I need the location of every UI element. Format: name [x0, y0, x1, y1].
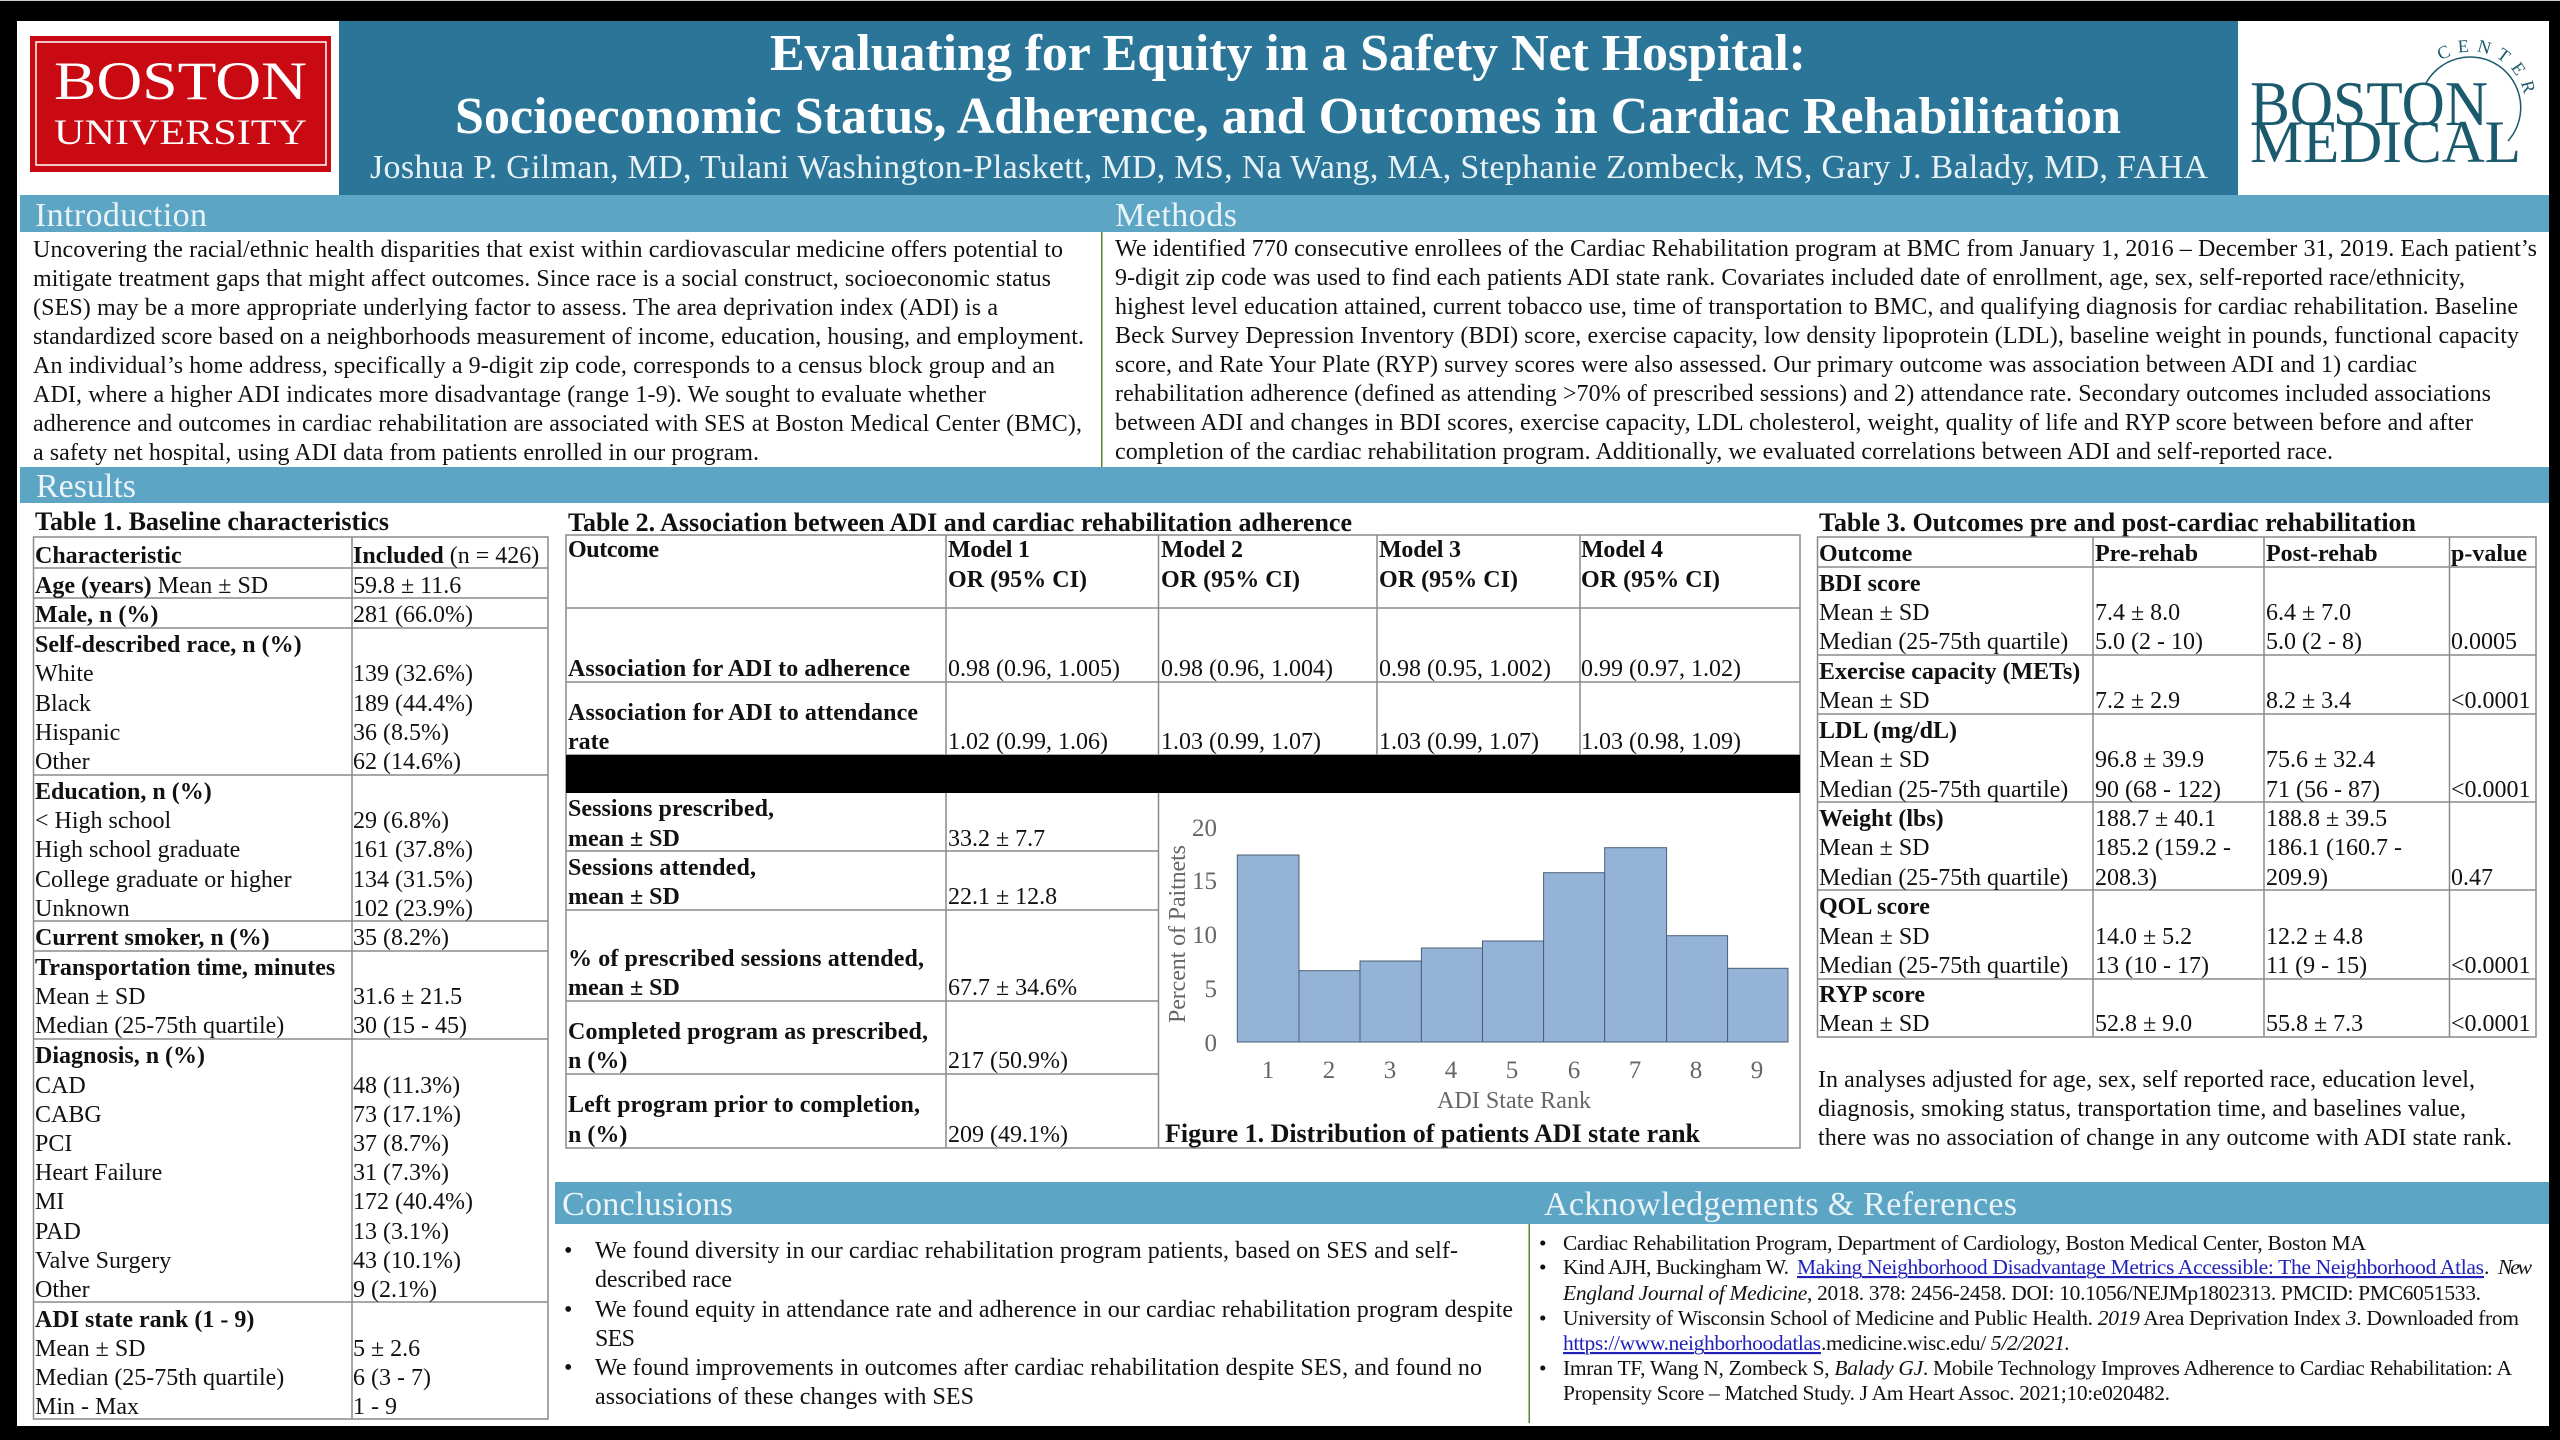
references list: England Journal of Medicine, 2018. 378: 2456-2458. DOI: 10.1056/NEJMp1802313. PMCID: PMC6051533. — [1562, 1281, 2481, 1305]
table 3 rows: 7.2 ± 2.9 — [2095, 688, 2180, 714]
program statistics rows: Sessions prescribed, — [568, 796, 774, 822]
heading: methods: Methods — [1115, 197, 1237, 234]
references list: • — [1539, 1306, 1547, 1330]
panel: conclusions — [555, 1182, 1530, 1423]
table 1 rows: 134 (31.5%) — [353, 867, 473, 893]
y axis title: Percent of Paitnets — [1165, 845, 1191, 1023]
table 3 rows: 5.0 (2 - 10) — [2095, 629, 2203, 655]
heading: introduction: Introduction — [35, 197, 207, 234]
table 2: association between ADI and adherence — [566, 508, 1800, 1148]
table 1 rows: PAD — [35, 1219, 81, 1245]
figure caption: Figure 1. Distribution of patients ADI state rank — [1165, 1119, 1701, 1148]
table 3 rows: Median (25-75th quartile) — [1819, 629, 2068, 655]
table 1 rows: 13 (3.1%) — [353, 1219, 449, 1245]
table 3 rows: 7.4 ± 8.0 — [2095, 600, 2180, 626]
header banner — [339, 21, 2238, 195]
table 1 rows: 172 (40.4%) — [353, 1189, 473, 1215]
table 3 rows: 185.2 (159.2 - — [2095, 835, 2231, 861]
logo: Boston Medical Center: BOSTON — [2250, 68, 2488, 139]
references list: Making Neighborhood Disadvantage Metrics Accessible: The Neighborhood Atlas — [1797, 1255, 2484, 1279]
table 3 rows: 209.9) — [2266, 865, 2328, 891]
panel: acknowledgements and references — [1529, 1182, 2549, 1405]
program statistics rows — [568, 796, 1077, 1148]
program statistics rows: mean ± SD — [568, 826, 680, 852]
table 1 rows: 161 (37.8%) — [353, 837, 473, 863]
program statistics rows: 67.7 ± 34.6% — [948, 975, 1077, 1001]
table 1 rows: 6 (3 - 7) — [353, 1365, 431, 1391]
table 1 rows: Heart Failure — [35, 1160, 162, 1186]
table 1 rows: Other — [35, 1277, 90, 1303]
table 3 rows: 12.2 ± 4.8 — [2266, 924, 2363, 950]
text block: introduction: An individual’s home address, specifically a 9-digit zip code, corresponds to a census block group and an — [33, 353, 1055, 379]
y axis labels: 20 — [1192, 815, 1217, 842]
table 1 rows: 189 (44.4%) — [353, 691, 473, 717]
references list: New — [2497, 1255, 2533, 1279]
table 1 rows: Valve Surgery — [35, 1248, 171, 1274]
conclusions bullet list: • — [564, 1355, 572, 1381]
references list — [1539, 1231, 2533, 1405]
text block: methods: 9-digit zip code was used to find each patients ADI state rank. Covariates included date of enrollment, age, sex, self-reported race/ethnicity, — [1115, 265, 2465, 291]
conclusions bullet list: • — [564, 1297, 572, 1323]
row: association for ADI to adherence: 0.99 (0.97, 1.02) — [1581, 656, 1741, 682]
table 3 rows: Post-rehab — [2266, 541, 2378, 567]
table 3 rows: 55.8 ± 7.3 — [2266, 1011, 2363, 1037]
x axis labels: 9 — [1751, 1057, 1763, 1084]
table 1 rows: 73 (17.1%) — [353, 1102, 461, 1128]
table 1 rows: ADI state rank (1 - 9) — [35, 1307, 254, 1333]
table 3 rows: Outcome — [1819, 541, 1913, 567]
text block: introduction: a safety net hospital, using ADI data from patients enrolled in our program. — [33, 440, 759, 466]
table 3 rows: Weight (lbs) — [1819, 806, 1944, 832]
text block: methods: between ADI and changes in BDI scores, exercise capacity, LDL cholesterol, weight, quality of life and RYP score between before and after — [1115, 410, 2473, 436]
x axis labels: 8 — [1690, 1057, 1702, 1084]
program statistics rows: 22.1 ± 12.8 — [948, 884, 1057, 910]
logo: Boston Medical Center: MEDICAL — [2250, 109, 2521, 175]
program statistics rows: n (%) — [568, 1048, 627, 1074]
table 3 rows: Exercise capacity (METs) — [1819, 659, 2080, 685]
table 1 title: Table 1. Baseline characteristics — [35, 507, 389, 536]
program statistics rows: % of prescribed sessions attended, — [568, 946, 924, 972]
table 3 rows: Mean ± SD — [1819, 924, 1930, 950]
table 3 rows: <0.0001 — [2451, 1011, 2531, 1037]
x axis labels: 1 — [1262, 1057, 1274, 1084]
y axis labels: 5 — [1204, 976, 1217, 1003]
text block: introduction: mitigate treatment gaps that might affect outcomes. Since race is a social construct, socioeconomic status — [33, 266, 1051, 292]
row: association for ADI to attendance rate: rate — [568, 729, 610, 755]
logo: Boston University — [30, 36, 331, 172]
panel: introduction — [20, 195, 1102, 466]
program statistics rows: n (%) — [568, 1122, 627, 1148]
references list: https://www.neighborhoodatlas — [1563, 1331, 1821, 1355]
heading: acknowledgements and references: Acknowledgements & References — [1544, 1186, 2017, 1223]
y axis labels: 15 — [1192, 868, 1217, 895]
table 1 rows: PCI — [35, 1131, 72, 1157]
y axis labels: 0 — [1204, 1030, 1217, 1057]
table 2 title: Table 2. Association between ADI and cardiac rehabilitation adherence — [568, 508, 1352, 537]
table 1 rows: < High school — [35, 808, 172, 834]
table 2 header row: Model 1 — [948, 537, 1030, 563]
conclusions bullet list: • — [564, 1238, 572, 1264]
text block: introduction: standardized score based on a neighborhoods measurement of income, education, housing, and employment. — [33, 324, 1084, 350]
adjusted analysis note: there was no association of change in any outcome with ADI state rank. — [1818, 1125, 2512, 1151]
references list: Kind AJH, Buckingham W. — [1563, 1255, 1789, 1279]
x axis labels: 5 — [1506, 1057, 1518, 1084]
table 1 rows: Other — [35, 749, 90, 775]
table 1 rows: Median (25-75th quartile) — [35, 1365, 284, 1391]
table 1 rows: 139 (32.6%) — [353, 661, 473, 687]
text block: methods: rehabilitation adherence (defined as attending >70% of prescribed sessions) and 2) attendance rate. Secondary outcomes included associations — [1115, 381, 2491, 407]
table 1 rows: 43 (10.1%) — [353, 1248, 461, 1274]
table 1 rows: 36 (8.5%) — [353, 720, 449, 746]
table 1 rows: Current smoker, n (%) — [35, 925, 270, 951]
table 1 rows: Characteristic — [35, 543, 182, 569]
adjusted analysis note: diagnosis, smoking status, transportation time, and baselines value, — [1818, 1096, 2466, 1122]
table 3 rows: Pre-rehab — [2095, 541, 2198, 567]
program statistics rows: Sessions attended, — [568, 855, 756, 881]
program statistics rows: 33.2 ± 7.7 — [948, 826, 1045, 852]
table 3 rows: Mean ± SD — [1819, 688, 1930, 714]
table 1 rows: 59.8 ± 11.6 — [353, 573, 461, 599]
table 1 rows: Age (years) Mean ± SD — [35, 573, 268, 599]
table 2 header row: Model 3 — [1379, 537, 1461, 563]
logo: Boston University: BOSTON — [54, 51, 307, 111]
table 3 rows: 75.6 ± 32.4 — [2266, 747, 2375, 773]
table 2 header row — [568, 537, 1720, 593]
row: association for ADI to adherence: 0.98 (0.96, 1.004) — [1161, 656, 1333, 682]
table 1 rows: 62 (14.6%) — [353, 749, 461, 775]
table 3 rows: RYP score — [1819, 982, 1925, 1008]
table 3 rows: 52.8 ± 9.0 — [2095, 1011, 2192, 1037]
x axis labels — [1262, 1057, 1763, 1084]
table 1 rows: Min - Max — [35, 1394, 139, 1420]
table 1 rows: Diagnosis, n (%) — [35, 1043, 205, 1069]
table 2 header row: Outcome — [568, 537, 659, 563]
table 1 rows: CAD — [35, 1073, 86, 1099]
table 3 rows: BDI score — [1819, 571, 1921, 597]
title — [455, 25, 2121, 145]
table 1 rows: College graduate or higher — [35, 867, 292, 893]
x axis labels: 6 — [1568, 1057, 1580, 1084]
references list: • — [1539, 1255, 1547, 1279]
table 1 rows: 31 (7.3%) — [353, 1160, 449, 1186]
row: association for ADI to attendance rate — [568, 700, 1741, 755]
conclusions bullet list: We found diversity in our cardiac rehabilitation program patients, based on SES and self- — [595, 1238, 1458, 1264]
table 3 rows: 11 (9 - 15) — [2266, 953, 2367, 979]
table 3 rows: LDL (mg/dL) — [1819, 718, 1957, 744]
x axis labels: 7 — [1629, 1057, 1641, 1084]
table 1 rows: Mean ± SD — [35, 1336, 146, 1362]
heading: results — [20, 467, 2549, 505]
table 1 rows: White — [35, 661, 94, 687]
table 1 rows: 281 (66.0%) — [353, 602, 473, 628]
text block: introduction: adherence and outcomes in cardiac rehabilitation are associated with SES at Boston Medical Center (BMC), — [33, 411, 1082, 437]
table 3 rows: 186.1 (160.7 - — [2266, 835, 2402, 861]
row: association for ADI to adherence — [568, 656, 1741, 682]
table 3 rows: Mean ± SD — [1819, 835, 1930, 861]
x axis labels: 3 — [1384, 1057, 1396, 1084]
x axis labels: 2 — [1323, 1057, 1335, 1084]
table 1 rows: Mean ± SD — [35, 984, 146, 1010]
text block: methods: completion of the cardiac rehabilitation program. Additionally, we evaluated correlations between ADI and self-reported race. — [1115, 439, 2333, 465]
references list: Imran TF, Wang N, Zombeck S, Balady GJ. Mobile Technology Improves Adherence to Cardiac Rehabilitation: A — [1563, 1356, 2512, 1380]
text block: methods: Beck Survey Depression Inventory (BDI) score, exercise capacity, low density lipoprotein (LDL), baseline weight in pounds, functional capacity — [1115, 323, 2519, 349]
heading: conclusions: Conclusions — [562, 1186, 733, 1223]
row: association for ADI to attendance rate: 1.02 (0.99, 1.06) — [948, 729, 1108, 755]
table 1 rows: Hispanic — [35, 720, 120, 746]
text block: introduction: Uncovering the racial/ethnic health disparities that exist within cardiovascular medicine offers potential to — [33, 237, 1063, 263]
table 2 header row: Model 2 — [1161, 537, 1243, 563]
table 3: outcomes pre and post rehab — [1818, 508, 2536, 1151]
authors: Joshua P. Gilman, MD, Tulani Washington-Plaskett, MD, MS, Na Wang, MA, Stephanie Zombeck, MS, Gary J. Balady, MD, FAHA — [370, 149, 2208, 186]
program statistics rows: mean ± SD — [568, 975, 680, 1001]
heading: results: Results — [36, 468, 136, 505]
table 3 rows: QOL score — [1819, 894, 1930, 920]
table 2 header row: Model 4 — [1581, 537, 1663, 563]
references list: . — [2484, 1255, 2489, 1279]
table 1 rows: Male, n (%) — [35, 602, 158, 628]
program statistics rows: mean ± SD — [568, 884, 680, 910]
table 1 rows: Transportation time, minutes — [35, 955, 335, 981]
table 1 rows: Self-described race, n (%) — [35, 632, 302, 658]
table 3 rows: 5.0 (2 - 8) — [2266, 629, 2362, 655]
table 3 rows: 13 (10 - 17) — [2095, 953, 2209, 979]
table 3 rows: Mean ± SD — [1819, 747, 1930, 773]
table 1 rows: High school graduate — [35, 837, 240, 863]
references list: Cardiac Rehabilitation Program, Department of Cardiology, Boston Medical Center, Boston MA — [1563, 1231, 2366, 1255]
y axis labels: 10 — [1192, 922, 1217, 949]
table 3 rows: Median (25-75th quartile) — [1819, 953, 2068, 979]
adjusted analysis note: In analyses adjusted for age, sex, self reported race, education level, — [1818, 1067, 2475, 1093]
program statistics rows: Left program prior to completion, — [568, 1092, 920, 1118]
row: association for ADI to adherence: 0.98 (0.95, 1.002) — [1379, 656, 1551, 682]
program statistics rows: 217 (50.9%) — [948, 1048, 1068, 1074]
program statistics rows: 209 (49.1%) — [948, 1122, 1068, 1148]
title: Evaluating for Equity in a Safety Net Hospital: — [770, 25, 1806, 82]
conclusions bullet list: We found improvements in outcomes after cardiac rehabilitation despite SES, and found no — [595, 1355, 1482, 1381]
table 1 rows: 9 (2.1%) — [353, 1277, 437, 1303]
conclusions bullet list: SES — [595, 1326, 635, 1352]
histogram bars — [1237, 848, 1788, 1042]
x axis title: ADI State Rank — [1437, 1088, 1591, 1114]
table 3 rows: 0.47 — [2451, 865, 2493, 891]
conclusions bullet list: We found equity in attendance rate and adherence in our cardiac rehabilitation program despite — [595, 1297, 1513, 1323]
table 1 rows: 30 (15 - 45) — [353, 1013, 467, 1039]
program statistics rows: Completed program as prescribed, — [568, 1019, 928, 1045]
table 1 rows: Unknown — [35, 896, 130, 922]
table 3 rows: 6.4 ± 7.0 — [2266, 600, 2351, 626]
table 1: baseline characteristics — [34, 507, 548, 1420]
table 1 rows: Black — [35, 691, 91, 717]
table 2 header row: OR (95% CI) — [1581, 567, 1720, 593]
table 3 rows: 71 (56 - 87) — [2266, 777, 2380, 803]
table 1 rows: 5 ± 2.6 — [353, 1336, 420, 1362]
table 3 rows: 96.8 ± 39.9 — [2095, 747, 2204, 773]
references list: • — [1539, 1231, 1547, 1255]
text block: methods — [1115, 236, 2537, 465]
table 1 rows — [35, 543, 539, 1420]
text block: introduction: (SES) may be a more appropriate underlying factor to assess. The area deprivation index (ADI) is a — [33, 295, 998, 321]
references list: .medicine.wisc.edu/ 5/2/2021. — [1821, 1331, 2070, 1355]
row: association for ADI to adherence: 0.98 (0.96, 1.005) — [948, 656, 1120, 682]
table 3 rows: 188.7 ± 40.1 — [2095, 806, 2216, 832]
table 3 rows: Median (25-75th quartile) — [1819, 777, 2068, 803]
table 1 rows: CABG — [35, 1102, 102, 1128]
text block: methods: score, and Rate Your Plate (RYP) survey scores were also assessed. Our primary outcome was association between ADI and 1) cardiac — [1115, 352, 2417, 378]
table 3 rows: <0.0001 — [2451, 777, 2531, 803]
table 3 rows: Median (25-75th quartile) — [1819, 865, 2068, 891]
table 3 rows: 90 (68 - 122) — [2095, 777, 2221, 803]
logo: Boston Medical Center: CENTER — [2438, 40, 2534, 94]
table 3 rows: 188.8 ± 39.5 — [2266, 806, 2387, 832]
table 1 rows: Included (n = 426) — [353, 543, 539, 569]
logo: Boston University: UNIVERSITY — [54, 112, 307, 152]
references list: • — [1539, 1356, 1547, 1380]
y axis labels — [1192, 815, 1217, 1057]
table 1 rows: 31.6 ± 21.5 — [353, 984, 462, 1010]
table 1 rows: 35 (8.2%) — [353, 925, 449, 951]
table 1 rows: MI — [35, 1189, 64, 1215]
table 2 header row: OR (95% CI) — [1379, 567, 1518, 593]
table 3 rows: Mean ± SD — [1819, 1011, 1930, 1037]
title: Socioeconomic Status, Adherence, and Outcomes in Cardiac Rehabilitation — [455, 88, 2121, 145]
table 1 rows: 29 (6.8%) — [353, 808, 449, 834]
x axis labels: 4 — [1445, 1057, 1458, 1084]
table 3 rows: 8.2 ± 3.4 — [2266, 688, 2351, 714]
table 1 rows: Median (25-75th quartile) — [35, 1013, 284, 1039]
table 1 rows: 48 (11.3%) — [353, 1073, 460, 1099]
row: association for ADI to adherence: Association for ADI to adherence — [568, 656, 910, 682]
table 3 rows: 14.0 ± 5.2 — [2095, 924, 2192, 950]
conclusions bullet list: associations of these changes with SES — [595, 1384, 974, 1410]
table 1 rows: Education, n (%) — [35, 779, 212, 805]
table 3 rows: Mean ± SD — [1819, 600, 1930, 626]
row: association for ADI to attendance rate: 1.03 (0.98, 1.09) — [1581, 729, 1741, 755]
row: association for ADI to attendance rate: Association for ADI to attendance — [568, 700, 918, 726]
table 2 header row: OR (95% CI) — [1161, 567, 1300, 593]
references list: University of Wisconsin School of Medicine and Public Health. 2019 Area Deprivation Index 3. Downloaded from — [1563, 1306, 2519, 1330]
table 3 title: Table 3. Outcomes pre and post-cardiac rehabilitation — [1819, 508, 2417, 537]
table 1 rows: 102 (23.9%) — [353, 896, 473, 922]
text block: methods: We identified 770 consecutive enrollees of the Cardiac Rehabilitation program at BMC from January 1, 2016 – December 31, 2019. Each patient’s — [1115, 236, 2537, 262]
row: association for ADI to attendance rate: 1.03 (0.99, 1.07) — [1379, 729, 1539, 755]
table 3 rows: 0.0005 — [2451, 629, 2517, 655]
table 3 rows: 208.3) — [2095, 865, 2157, 891]
text block: introduction: ADI, where a higher ADI indicates more disadvantage (range 1-9). We sought to evaluate whether — [33, 382, 986, 408]
adjusted analysis note — [1818, 1067, 2512, 1151]
conclusions bullet list: described race — [595, 1267, 732, 1293]
table 2 header row: OR (95% CI) — [948, 567, 1087, 593]
panel: methods — [1101, 195, 2549, 467]
text block: introduction — [33, 237, 1084, 466]
conclusions bullet list — [564, 1238, 1513, 1410]
text block: methods: highest level education attained, current tobacco use, time of transportation to BMC, and qualifying diagnosis for cardiac rehabilitation. Baseline — [1115, 294, 2518, 320]
table 1 rows: 1 - 9 — [353, 1394, 397, 1420]
table 3 rows — [1819, 541, 2531, 1037]
table 3 rows: <0.0001 — [2451, 953, 2531, 979]
row: association for ADI to attendance rate: 1.03 (0.99, 1.07) — [1161, 729, 1321, 755]
references list: Propensity Score – Matched Study. J Am Heart Assoc. 2021;10:e020482. — [1563, 1381, 2170, 1405]
figure 1: histogram of ADI state rank — [1165, 815, 1788, 1148]
logo: Boston Medical Center — [2250, 40, 2534, 175]
table 3 rows: <0.0001 — [2451, 688, 2531, 714]
table 1 rows: 37 (8.7%) — [353, 1131, 449, 1157]
table 3 rows: p-value — [2451, 541, 2527, 567]
